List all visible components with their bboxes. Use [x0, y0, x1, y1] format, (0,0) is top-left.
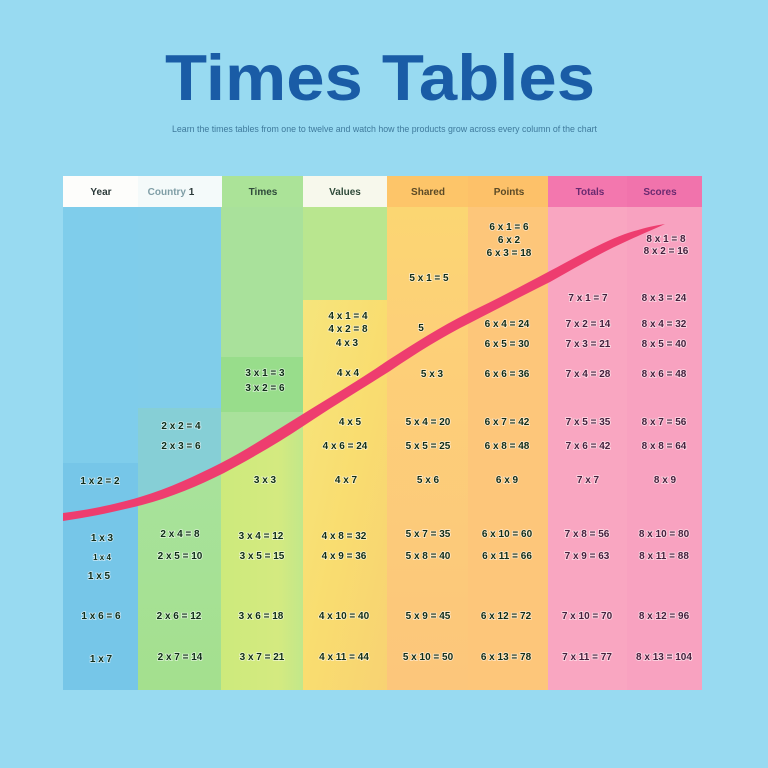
- column 6 figures: 6 x 12 = 72: [481, 611, 532, 622]
- column 5 background: amber: [387, 207, 468, 690]
- column 4 figures: 4 x 10 = 40: [319, 611, 370, 622]
- column 3 figures: 3 x 3: [254, 475, 277, 486]
- column 5 figures: 5 x 3: [421, 369, 444, 380]
- column 5 figures: 5 x 10 = 50: [403, 652, 454, 663]
- column 3 figures: 3 x 1 = 3: [245, 368, 285, 379]
- column 4 background: green to yellow: [303, 207, 387, 690]
- column 3 background: green over yellow-green: [221, 207, 303, 690]
- column 6 figures: 6 x 11 = 66: [482, 551, 532, 562]
- column 6 figures: [481, 222, 533, 663]
- column 7 figures: [562, 293, 613, 663]
- column 4 figures: 4 x 5: [339, 417, 362, 428]
- column 8 figures: 8 x 6 = 48: [642, 369, 687, 380]
- column 2 figures: 2 x 7 = 14: [158, 652, 203, 663]
- trend curve: [63, 224, 665, 521]
- column 6 figures: 6 x 9: [496, 475, 519, 486]
- column 4 figures: [319, 311, 370, 663]
- column 1 background: blue: [63, 207, 138, 690]
- column 5 figures: 5 x 8 = 40: [406, 551, 451, 562]
- column 5 figures: 5 x 1 = 5: [409, 273, 449, 284]
- column 7 figures: 7 x 2 = 14: [566, 319, 611, 330]
- column 2 figures: 2 x 4 = 8: [160, 529, 200, 540]
- column 5 figures: 5 x 9 = 45: [406, 611, 451, 622]
- column 3 figures: 3 x 5 = 15: [240, 551, 285, 562]
- column 6 figures: 6 x 8 = 48: [485, 441, 530, 452]
- column 8 figures: 8 x 9: [654, 475, 677, 486]
- table: [63, 176, 702, 690]
- column 4 figures: 4 x 3: [336, 338, 359, 349]
- column 8 figures: 8 x 5 = 40: [642, 339, 687, 350]
- column 5 figures: 5 x 4 = 20: [406, 417, 451, 428]
- column 8 figures: 8 x 13 = 104: [636, 652, 692, 663]
- column 7 figures: 7 x 8 = 56: [565, 529, 610, 540]
- column 6 figures: 6 x 13 = 78: [481, 652, 532, 663]
- column 4 figures: 4 x 8 = 32: [322, 531, 367, 542]
- column 6 background: orange: [468, 207, 548, 690]
- header row: [63, 176, 702, 207]
- column 5 figures: 5 x 5 = 25: [406, 441, 451, 452]
- header: Scores: [627, 176, 702, 207]
- column 7 figures: 7 x 7: [577, 475, 600, 486]
- column 1 figures: 1 x 4: [93, 553, 111, 562]
- column 8 figures: 8 x 12 = 96: [639, 611, 690, 622]
- column 6 figures: 6 x 1 = 6: [489, 222, 529, 233]
- column 3 figures: 3 x 7 = 21: [240, 652, 285, 663]
- column 4 figures: 4 x 11 = 44: [319, 652, 369, 663]
- column 2 figures: [157, 421, 203, 663]
- column 4 figures: 4 x 2 = 8: [328, 324, 368, 335]
- column 3 figures: 3 x 4 = 12: [239, 531, 284, 542]
- header: Values: Values: [329, 187, 361, 198]
- column 1 figures: 1 x 7: [90, 654, 113, 665]
- column 4 figures: 4 x 9 = 36: [322, 551, 367, 562]
- column 5 figures: 5: [418, 323, 424, 334]
- column 8 figures: 8 x 3 = 24: [642, 293, 687, 304]
- column 7 figures: 7 x 1 = 7: [568, 293, 608, 304]
- column 6 figures: 6 x 6 = 36: [485, 369, 530, 380]
- column 1 figures: [80, 476, 121, 665]
- header: Shared: Shared: [411, 187, 445, 198]
- column 5 figures: 5 x 7 = 35: [406, 529, 451, 540]
- column 8 figures: 8 x 8 = 64: [642, 441, 687, 452]
- column 8 figures: 8 x 11 = 88: [639, 551, 689, 562]
- column 4 figures: 4 x 4: [337, 368, 360, 379]
- column 6 figures: 6 x 7 = 42: [485, 417, 530, 428]
- header: Scores: Scores: [643, 187, 677, 198]
- column 6 figures: 6 x 5 = 30: [485, 339, 530, 350]
- column 4 figures: 4 x 7: [335, 475, 358, 486]
- column 6 figures: 6 x 4 = 24: [485, 319, 530, 330]
- column 2 figures: 2 x 6 = 12: [157, 611, 202, 622]
- header: Country 1: Country 1: [148, 187, 195, 198]
- column 4 figures: 4 x 1 = 4: [328, 311, 368, 322]
- column 1 figures: 1 x 6 = 6: [81, 611, 121, 622]
- column 2 background: blue to green: [138, 207, 221, 690]
- column 8 figures: 8 x 2 = 16: [644, 246, 689, 257]
- column 1 figures: 1 x 2 = 2: [80, 476, 120, 487]
- header: Values: [303, 176, 387, 207]
- subtitle: Learn the times tables from one to twelve and watch how the products grow across every column of the chart: [172, 124, 597, 135]
- column 7 background: pink: [548, 207, 627, 690]
- column 6 figures: 6 x 2: [498, 235, 521, 246]
- column 3 figures: 3 x 2 = 6: [245, 383, 285, 394]
- column 7 figures: 7 x 5 = 35: [566, 417, 611, 428]
- header: Country 1: [138, 176, 222, 207]
- header: Totals: Totals: [576, 187, 605, 198]
- header: Times: [222, 176, 303, 207]
- column 5 figures: 5 x 6: [417, 475, 440, 486]
- header: Totals: [548, 176, 627, 207]
- column 1 figures: 1 x 3: [91, 533, 114, 544]
- column 6 figures: 6 x 3 = 18: [487, 248, 532, 259]
- column 7 figures: 7 x 4 = 28: [566, 369, 611, 380]
- header: Times: Times: [249, 187, 278, 198]
- column 7 figures: 7 x 11 = 77: [562, 652, 612, 663]
- column 7 figures: 7 x 9 = 63: [565, 551, 610, 562]
- column 7 figures: 7 x 3 = 21: [566, 339, 611, 350]
- column 2 figures: 2 x 2 = 4: [161, 421, 201, 432]
- column 8 figures: [636, 234, 692, 663]
- column 7 figures: 7 x 6 = 42: [566, 441, 611, 452]
- column 1 figures: 1 x 5: [88, 571, 111, 582]
- column 8 figures: 8 x 7 = 56: [642, 417, 687, 428]
- column 2 figures: 2 x 3 = 6: [161, 441, 201, 452]
- column 3 figures: [239, 368, 285, 663]
- column 4 figures: 4 x 6 = 24: [323, 441, 368, 452]
- column 6 figures: 6 x 10 = 60: [482, 529, 533, 540]
- title: Times Tables: [165, 41, 595, 114]
- header: Year: [63, 176, 138, 207]
- column 8 figures: 8 x 4 = 32: [642, 319, 687, 330]
- header: Shared: [387, 176, 468, 207]
- column 8 figures: 8 x 1 = 8: [646, 234, 686, 245]
- header: Year: Year: [90, 187, 112, 198]
- column 8 figures: 8 x 10 = 80: [639, 529, 690, 540]
- column 3 figures: 3 x 6 = 18: [239, 611, 284, 622]
- header: Points: [468, 176, 548, 207]
- column 5 figures: [403, 273, 454, 663]
- column 7 figures: 7 x 10 = 70: [562, 611, 613, 622]
- column 2 figures: 2 x 5 = 10: [158, 551, 203, 562]
- header: Points: Points: [494, 187, 525, 198]
- column 8 background: pink: [627, 207, 702, 690]
